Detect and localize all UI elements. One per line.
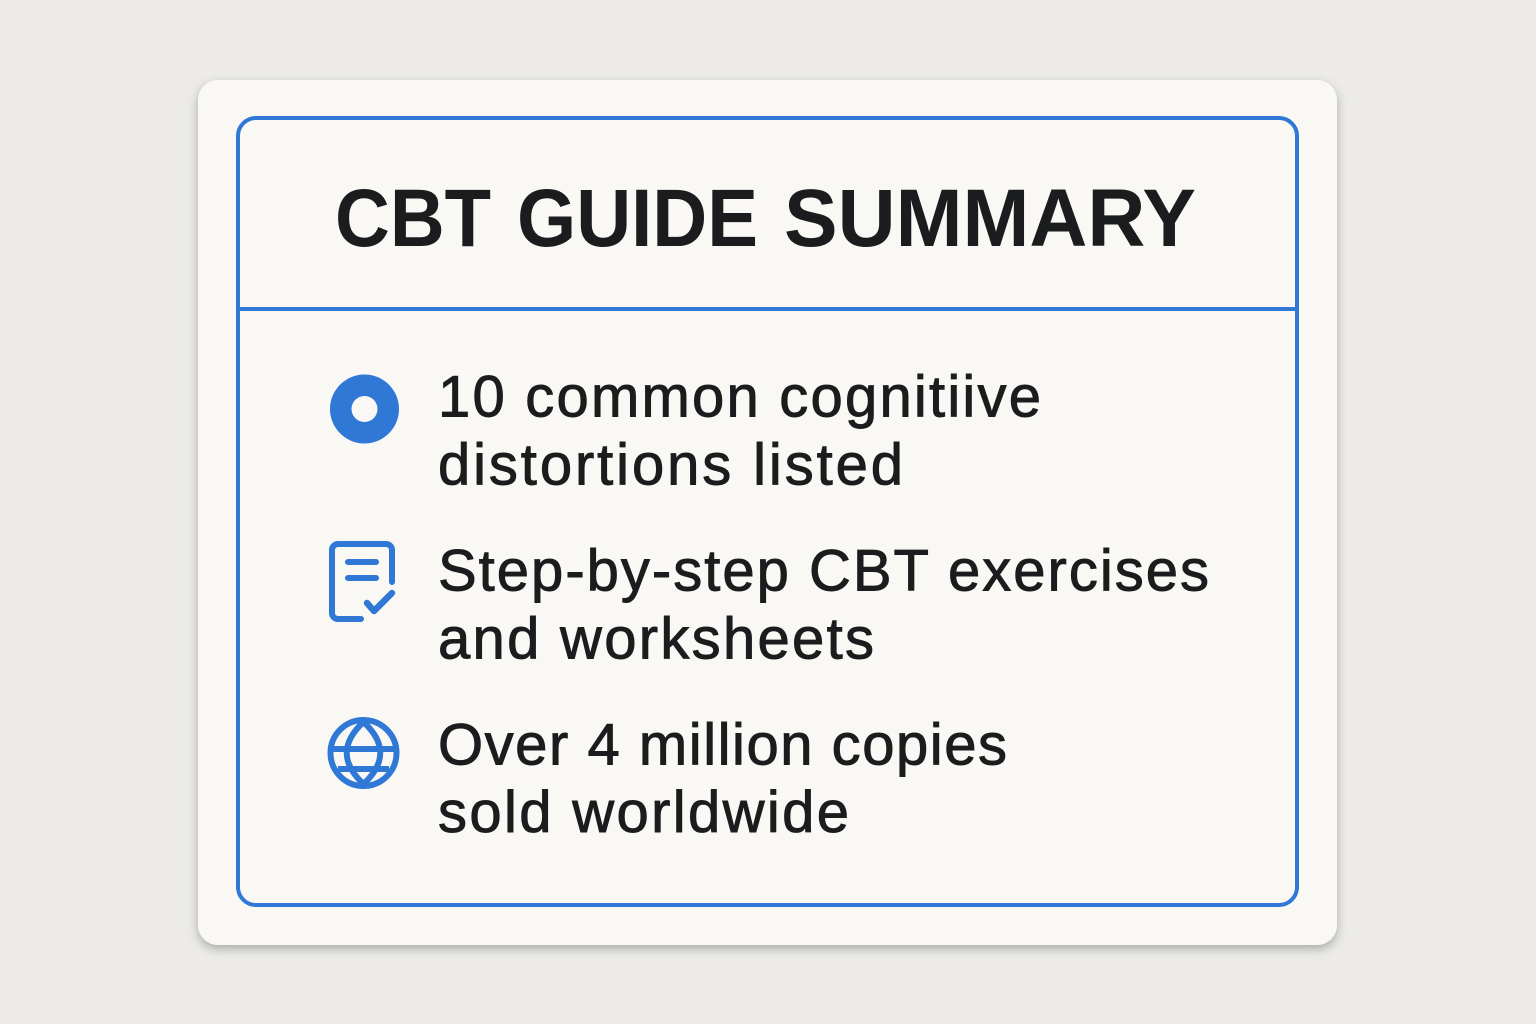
text: distortions: distortions listed — [438, 432, 903, 498]
text: exercises: Step-by-step CBT exercises — [438, 538, 1209, 604]
panel: summary card — [198, 80, 1337, 945]
text: exercises: and worksheets — [438, 606, 874, 672]
header divider — [238, 307, 1297, 311]
title — [335, 173, 1196, 264]
text: copies sold: Over 4 million copies — [438, 712, 1007, 778]
text: copies sold: sold worldwide — [438, 780, 849, 845]
text: copies sold — [438, 712, 1007, 845]
title: CBT — [335, 173, 491, 264]
text: distortions: 10 common cognitiive — [438, 364, 1041, 430]
text: exercises — [438, 538, 1209, 672]
title: SUMMARY — [784, 173, 1196, 264]
text: distortions — [438, 364, 1041, 498]
title: GUIDE — [517, 173, 758, 264]
icon: globe — [330, 720, 396, 786]
icon: target circle — [330, 374, 399, 444]
icon: checklist document — [332, 544, 392, 619]
panel: blue frame — [238, 118, 1297, 905]
